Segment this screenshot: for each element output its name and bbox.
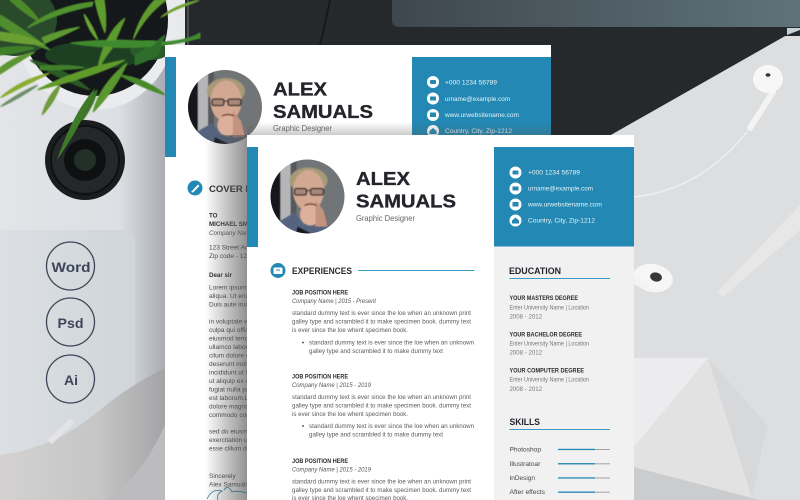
skill bars: [558, 449, 610, 493]
cover letter heading: [188, 180, 283, 196]
job entry 3: galley type and scrambled it to make specimen book. dummy text: [292, 487, 471, 494]
cover letter body: in voluptate velit: [209, 318, 256, 326]
back page contact details: www.urwebsitename.com: [444, 112, 519, 119]
contact list: urname@example.com: [528, 186, 593, 192]
cover letter body: fugiat nulla pariatur: [209, 386, 265, 394]
job entry 1: [292, 290, 474, 355]
cover letter body: Lorem ipsum dolor sit: [209, 284, 271, 292]
background: left desk panel: [0, 0, 166, 500]
job entry 1: standard dummy text is ever since the loe when an unknown print: [292, 310, 471, 317]
name and role: [356, 168, 456, 223]
cover letter body: Sincerely: [209, 473, 236, 480]
back page contact details: urname@example.com: [445, 96, 510, 103]
shadow cast by front page: [205, 122, 551, 500]
contact list: [510, 166, 602, 226]
job entry 1: galley type and scrambled it to make specimen book. dummy text: [292, 318, 471, 326]
job entry 1: galley type and scrambled it to make dummy text: [309, 348, 443, 355]
icon: website: [510, 198, 522, 210]
back page contact details: +000 1234 56789: [445, 80, 497, 86]
cover letter body: sed do eiusmod: [209, 428, 255, 436]
skills section: [510, 417, 610, 496]
job entry 3: JOB POSITION HERE: [292, 458, 348, 465]
format badge: Psd: [46, 298, 94, 346]
experiences heading: [270, 263, 474, 278]
cover letter body: exercitation ullamco: [209, 437, 267, 444]
back page name: ALEX: [273, 78, 328, 100]
job entry 1: is ever since the loe whent specimen book.: [292, 327, 408, 334]
job entry 1: Company Name | 2015 - Present: [292, 298, 376, 305]
resume page: back cover letter: [165, 45, 551, 500]
contact list: +000 1234 56789: [528, 170, 580, 176]
icon: phone: [510, 166, 522, 178]
skills section: Photoshop: [510, 446, 541, 454]
cover letter body: 123 Street Address: [209, 244, 265, 252]
cover letter body: Company Name: [209, 230, 254, 237]
format badge: Word: Word: [52, 259, 90, 275]
plant: [0, 0, 200, 130]
job entry 2: JOB POSITION HERE: [292, 374, 348, 380]
job entry 1: JOB POSITION HERE: [292, 290, 348, 296]
education section: Enter University Name | Location: [510, 340, 589, 348]
job entry 3: [292, 458, 471, 500]
skills section: InDesign: [510, 475, 535, 482]
education section: 2008 - 2012: [510, 350, 543, 357]
cover letter body: Alex Samuals: [209, 482, 249, 488]
job entry 2: galley type and scrambled it to make dummy text: [309, 432, 443, 438]
job entry 1: standard dummy text is ever since the loe when an unknown: [309, 340, 474, 346]
name and role: SAMUALS: [356, 190, 456, 212]
job entry 2: is ever since the loe whent specimen book.: [292, 411, 408, 418]
format badge: Psd: Psd: [58, 315, 84, 331]
skills section: After effects: [510, 489, 546, 496]
education section: 2008 - 2012: [510, 386, 543, 393]
paper pyramid: [634, 358, 767, 500]
cover letter body: aliqua. Ut enim ad: [209, 293, 262, 300]
cover letter body: [207, 212, 271, 500]
contact list: www.urwebsitename.com: [527, 202, 602, 208]
name and role: ALEX: [356, 168, 411, 189]
cover letter body: Zip code - 1234: [209, 253, 255, 260]
cover letter body: ullamco laboris: [209, 344, 253, 351]
skills section: Illustratoar: [510, 461, 541, 468]
contact panel: [494, 147, 634, 246]
education section: YOUR BACHELOR DEGREE: [510, 332, 582, 338]
education section: YOUR MASTERS DEGREE: [510, 295, 578, 302]
cover letter body: Dear sir: [209, 272, 233, 279]
back page name: [273, 78, 373, 133]
cover letter body: TO: [209, 212, 218, 220]
icon: camera lens: [45, 88, 125, 200]
education section: Enter University Name | Location: [510, 377, 589, 384]
job entry 3: Company Name | 2015 - 2019: [292, 466, 372, 474]
cover letter body: cilum dolore eu: [209, 352, 253, 360]
cover letter body: deserunt mollit: [209, 361, 251, 368]
job entry 2: standard dummy text is ever since the loe when an unknown print: [292, 394, 471, 401]
background: dark monitor and tray: [167, 0, 800, 136]
white bar object: [717, 205, 800, 297]
portrait: [270, 158, 346, 234]
earphones and cord: [631, 65, 783, 295]
back page name: Graphic Designer: [273, 124, 332, 133]
resume page: front: [247, 135, 634, 500]
icon: home: [510, 214, 522, 226]
back page contact details: [427, 76, 519, 137]
education section: YOUR COMPUTER DEGREE: [510, 368, 584, 375]
cover letter body: ut aliquip ex ea: [209, 378, 253, 385]
education section: Enter University Name | Location: [510, 304, 589, 312]
education section: 2008 - 2012: [510, 314, 543, 320]
cover letter heading: COVER LETTER: [209, 184, 283, 195]
back page name: SAMUALS: [273, 101, 373, 122]
cover letter body: Duis aute irure dolor: [209, 302, 268, 308]
job entry 2: [292, 374, 474, 438]
skills section: SKILLS: [510, 417, 540, 428]
cover letter body: esse cillum dolore: [209, 446, 261, 452]
cover letter body: dolore magna: [209, 404, 249, 410]
education section: EDUCATION: [509, 266, 561, 277]
cover letter body: incididunt ut labore: [209, 370, 264, 376]
job entry 2: Company Name | 2015 - 2019: [292, 382, 372, 389]
job entry 2: standard dummy text is ever since the loe when an unknown: [309, 423, 474, 430]
format badge: Ai: [46, 355, 94, 403]
cover letter body: est laborum.Lorem: [209, 395, 263, 402]
format badge: Ai: Ai: [64, 372, 78, 388]
back page contact panel: [412, 57, 551, 147]
accent tab: [247, 147, 258, 247]
name and role: Graphic Designer: [356, 214, 415, 223]
back page portrait: [187, 69, 263, 145]
job entry 3: standard dummy text is ever since the loe when an unknown print: [292, 478, 471, 486]
cover letter body: MICHAEL SMITH: [209, 221, 259, 228]
cover letter body: eiusmod tempor: [209, 336, 256, 342]
cover letter body: commodo consequat: [209, 412, 270, 419]
education section: [509, 266, 610, 393]
format badge: Word: [46, 242, 94, 290]
back page contact details: Country, City, Zip-1212: [445, 128, 512, 135]
icon: email: [510, 182, 522, 194]
contact list: Country, City, Zip-1212: [528, 218, 595, 224]
sidebar background: [494, 246, 634, 500]
cover letter body: culpa qui officia: [209, 327, 254, 334]
job entry 2: galley type and scrambled it to make specimen book. dummy text: [292, 402, 471, 410]
experiences heading: EXPERIENCES: [292, 266, 352, 277]
back page accent tab: [165, 57, 176, 157]
